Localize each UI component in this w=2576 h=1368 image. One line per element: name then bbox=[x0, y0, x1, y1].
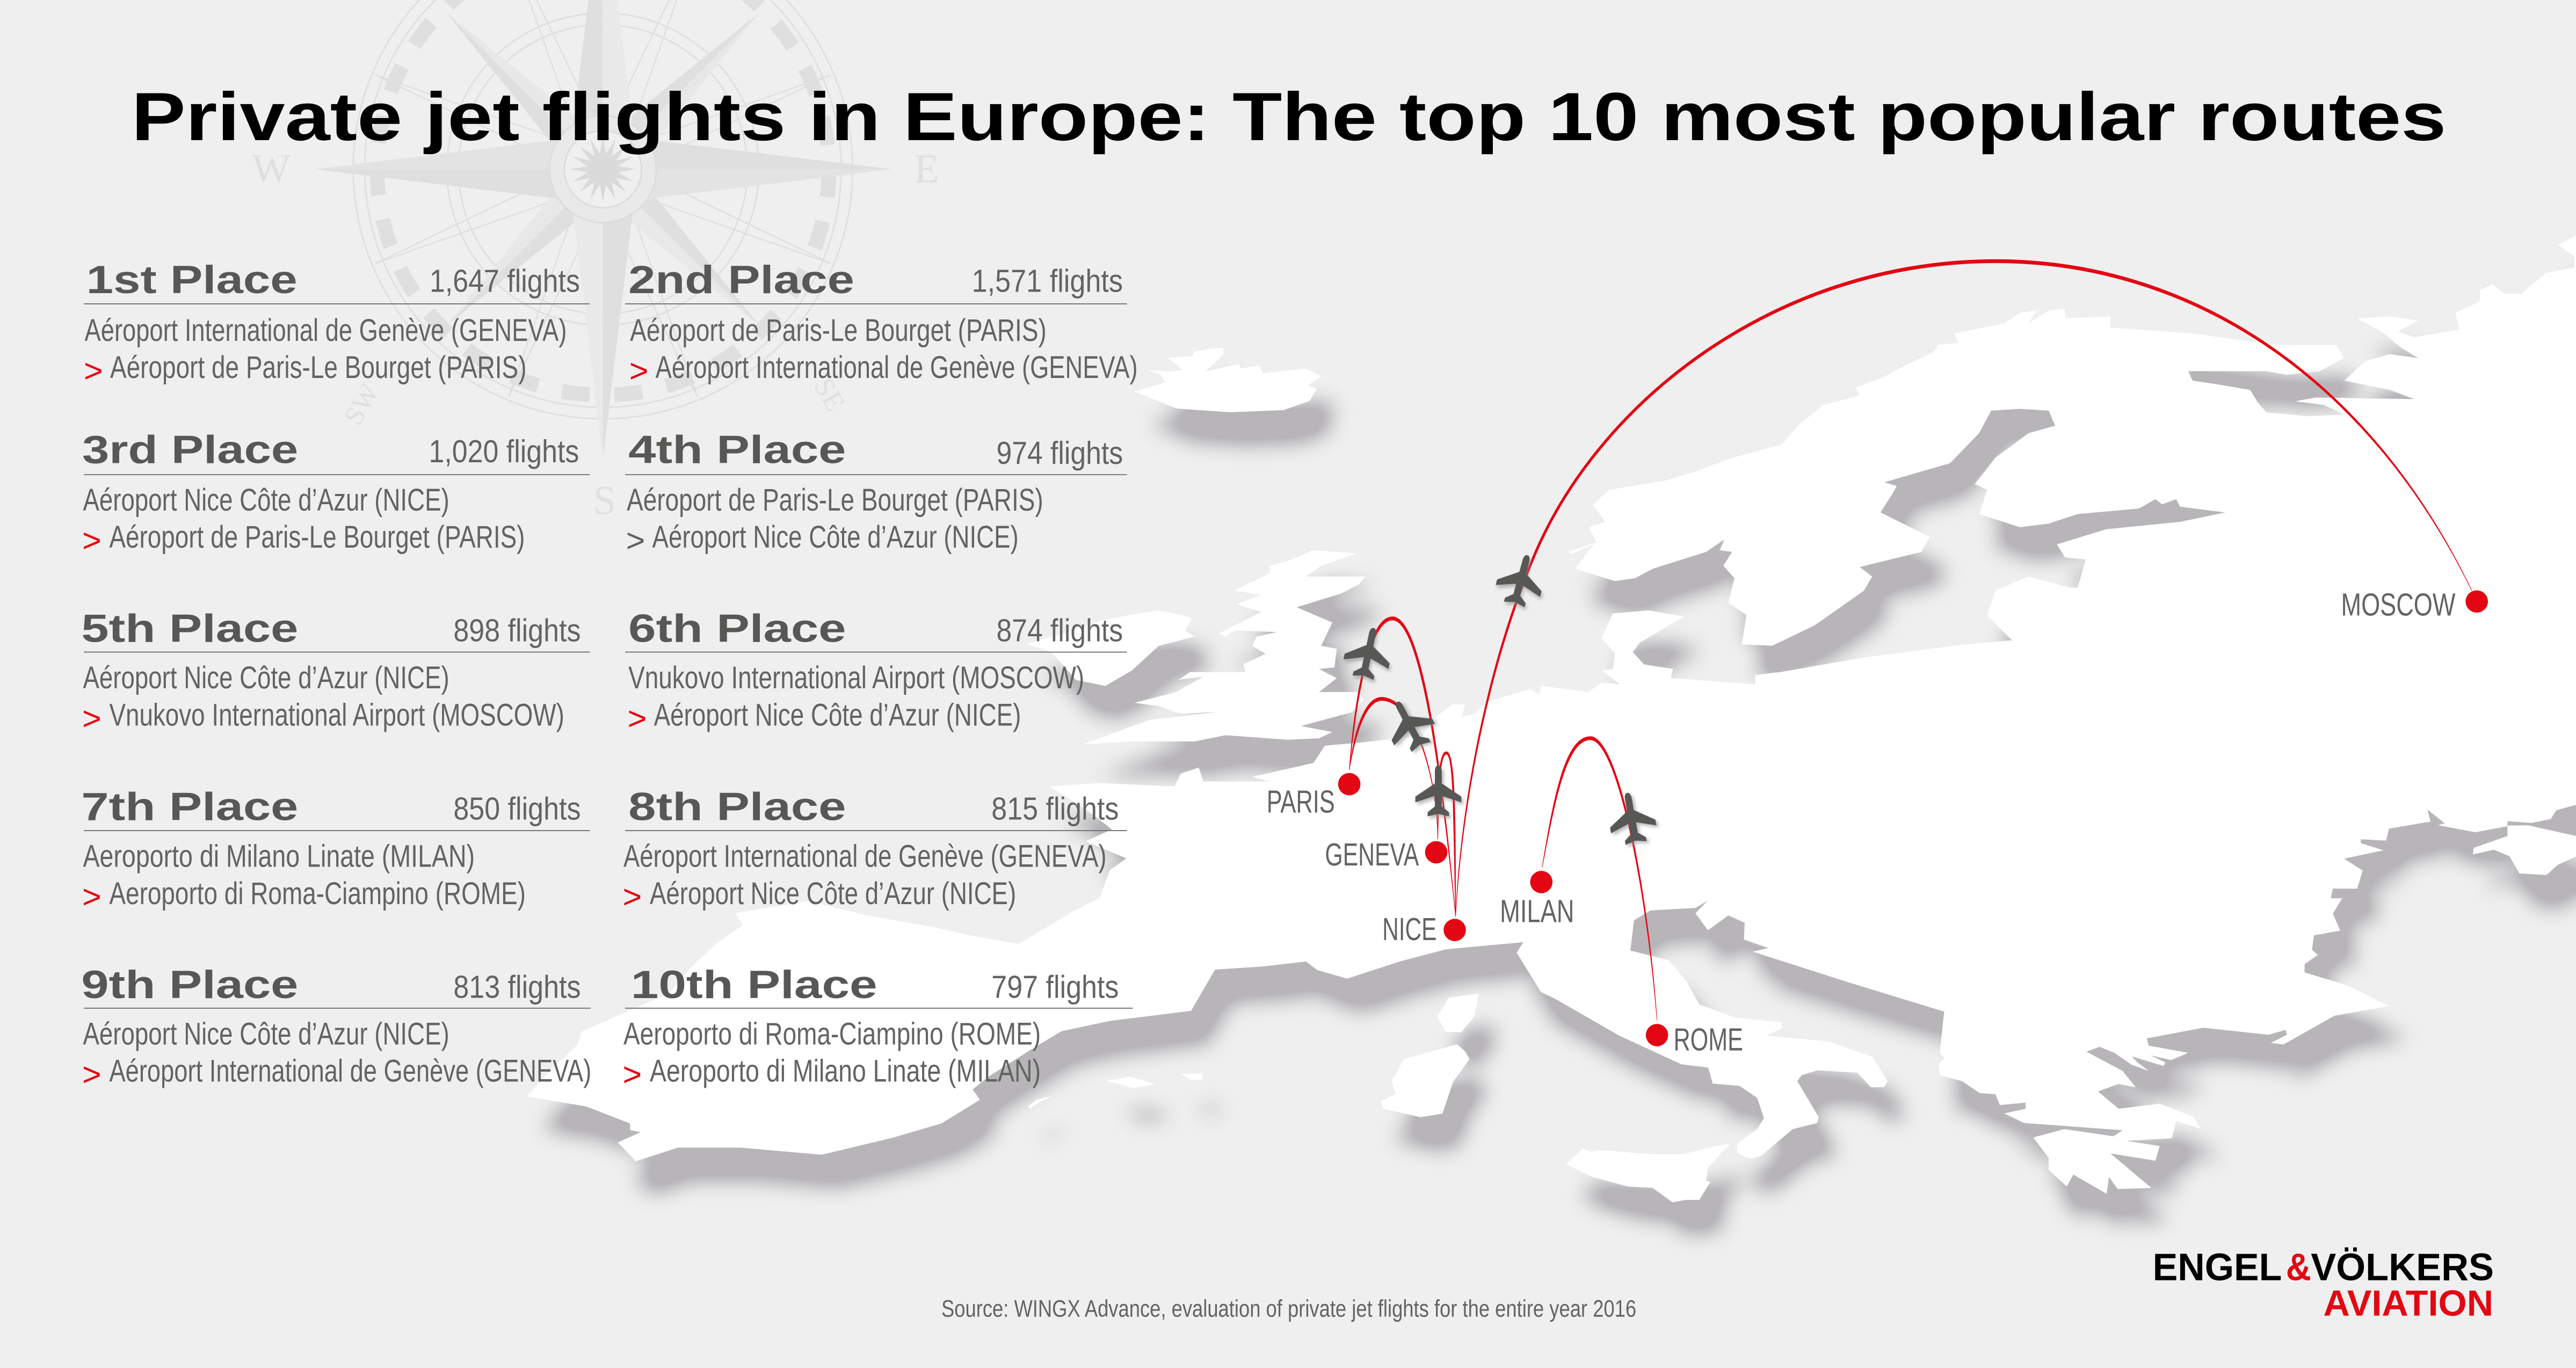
panel: 4th place bbox=[625, 428, 1127, 558]
panel: 9th place bbox=[81, 963, 591, 1093]
panel: 10th place: > bbox=[622, 1056, 642, 1093]
panel: 1st place: 1st Place bbox=[86, 258, 297, 302]
panel: 6th place: 874 flights bbox=[996, 613, 1123, 649]
panel: 1st place: Aéroport de Paris-Le Bourget (PARIS) bbox=[110, 350, 527, 385]
panel: 1st place: > bbox=[84, 353, 103, 389]
panel: 9th place: Aéroport International de Genève (GENEVA) bbox=[109, 1054, 591, 1089]
panel: 5th place: 5th Place bbox=[81, 606, 298, 650]
panel: 8th place: 815 flights bbox=[991, 791, 1119, 827]
panel: 10th place: Aeroporto di Roma-Ciampino (ROME) bbox=[623, 1017, 1041, 1052]
route: Milan to Rome bbox=[1542, 737, 1657, 1020]
city marker: Milan: MILAN bbox=[1500, 893, 1574, 929]
logo: Engel & Völkers Aviation: AVIATION bbox=[2323, 1284, 2493, 1324]
title: Private jet flights in Europe: The top 10 most popular routes bbox=[132, 78, 2446, 155]
Sicily bbox=[1566, 1144, 1730, 1202]
panel: 6th place: 6th Place bbox=[628, 606, 846, 650]
mainland Europe bbox=[527, 235, 2576, 1194]
panel: 4th place: > bbox=[626, 522, 645, 558]
panel: 7th place: Aeroporto di Milano Linate (MILAN) bbox=[83, 839, 475, 874]
panel: 10th place: Aeroporto di Milano Linate (MILAN) bbox=[650, 1054, 1041, 1089]
Iceland bbox=[1134, 348, 1321, 412]
route: Paris to Nice bbox=[1349, 617, 1456, 916]
panel: 2nd place: 2nd Place bbox=[628, 258, 854, 302]
Ireland bbox=[1027, 610, 1194, 686]
panel: 2nd place: 1,571 flights bbox=[972, 263, 1123, 299]
city marker: Geneva: GENEVA bbox=[1325, 836, 1419, 872]
panel: 4th place: 4th Place bbox=[628, 428, 846, 472]
panel: 3rd place: > bbox=[82, 522, 101, 558]
panel: 8th place: > bbox=[622, 878, 642, 915]
Sardinia bbox=[1381, 1044, 1470, 1117]
plane: Paris to Nice route bbox=[1340, 623, 1396, 682]
panel: 1st place: Aéroport International de Genève (GENEVA) bbox=[85, 313, 567, 348]
route: Nice to Moscow bbox=[1456, 259, 2472, 916]
panel: 2nd place: Aéroport International de Genève (GENEVA) bbox=[656, 350, 1138, 385]
panel: 6th place: Vnukovo International Airport (MOSCOW) bbox=[628, 660, 1084, 695]
panel: 1st place: 1,647 flights bbox=[430, 263, 580, 299]
Caucasus landmass bbox=[2473, 825, 2576, 875]
panel: 5th place: Aéroport Nice Côte d’Azur (NICE) bbox=[83, 660, 449, 695]
logo: Engel & Völkers Aviation: VÖLKERS bbox=[2311, 1246, 2494, 1289]
compass rose watermark: SW bbox=[338, 379, 386, 431]
panel: 8th place: Aéroport International de Genève (GENEVA) bbox=[623, 839, 1106, 874]
panel: 6th place bbox=[625, 606, 1127, 737]
city marker: Rome: ROME bbox=[1674, 1022, 1743, 1058]
panel: 5th place: > bbox=[82, 700, 101, 737]
panel: 7th place: Aeroporto di Roma-Ciampino (ROME) bbox=[109, 876, 526, 911]
panel: 6th place: > bbox=[628, 700, 647, 737]
panel: 3rd place bbox=[82, 428, 590, 558]
panel: 9th place: Aéroport Nice Côte d’Azur (NICE) bbox=[83, 1017, 449, 1052]
panel: 10th place: 797 flights bbox=[991, 969, 1119, 1005]
source note: Source: WINGX Advance, evaluation of private jet flights for the entire year 2016 bbox=[941, 1296, 1636, 1322]
compass rose watermark bbox=[252, 0, 939, 523]
panel: 9th place: 813 flights bbox=[453, 969, 580, 1005]
panel: 1st place bbox=[84, 258, 590, 389]
plane: Geneva to Nice route bbox=[1416, 766, 1461, 816]
panel: 9th place: 9th Place bbox=[81, 963, 298, 1007]
city marker: Rome bbox=[1646, 1022, 1743, 1058]
plane: Paris to Geneva route bbox=[1377, 691, 1441, 758]
panel: 9th place: > bbox=[82, 1056, 101, 1093]
panel: 3rd place: 3rd Place bbox=[82, 428, 298, 472]
panel: 5th place: 898 flights bbox=[453, 613, 580, 649]
city marker: Milan bbox=[1500, 871, 1574, 929]
panel: 4th place: Aéroport Nice Côte d’Azur (NICE) bbox=[652, 520, 1019, 555]
panel: 5th place bbox=[81, 606, 590, 737]
panel: 7th place: > bbox=[82, 878, 101, 915]
compass rose watermark: E bbox=[914, 146, 939, 192]
city marker: Paris: PARIS bbox=[1267, 783, 1335, 819]
compass rose watermark: SE bbox=[808, 373, 851, 417]
panel: 3rd place: 1,020 flights bbox=[429, 433, 579, 469]
panel: 2nd place: > bbox=[629, 353, 648, 389]
panel: 2nd place bbox=[625, 258, 1138, 389]
Great Britain bbox=[1083, 550, 1366, 744]
panel: 3rd place: Aéroport Nice Côte d’Azur (NICE) bbox=[83, 483, 449, 518]
panel: 10th place bbox=[622, 963, 1133, 1093]
panel: 3rd place: Aéroport de Paris-Le Bourget (PARIS) bbox=[109, 520, 525, 555]
map of Europe with drop shadow bbox=[527, 235, 2576, 1202]
panel: 10th place: 10th Place bbox=[631, 963, 877, 1007]
panel: 2nd place: Aéroport de Paris-Le Bourget (PARIS) bbox=[630, 313, 1047, 348]
plane: Milan to Rome route bbox=[1605, 789, 1659, 847]
panel: 6th place: Aéroport Nice Côte d’Azur (NICE) bbox=[654, 698, 1021, 733]
panel: 8th place bbox=[622, 785, 1127, 915]
city marker: Moscow: MOSCOW bbox=[2341, 586, 2456, 622]
plane: Moscow route bbox=[1492, 549, 1550, 610]
route: Geneva to Nice bbox=[1438, 752, 1456, 916]
compass rose watermark: S bbox=[593, 478, 616, 523]
panel: 8th place: 8th Place bbox=[628, 785, 846, 829]
Balearic islands bbox=[1028, 1073, 1202, 1109]
compass rose watermark: W bbox=[252, 146, 291, 192]
route: Paris to Geneva bbox=[1349, 697, 1438, 839]
logo: Engel & Völkers Aviation: & bbox=[2286, 1246, 2311, 1289]
panel: 4th place: Aéroport de Paris-Le Bourget (PARIS) bbox=[627, 483, 1043, 518]
logo: Engel & Völkers Aviation bbox=[2153, 1246, 2494, 1324]
city marker: Nice: NICE bbox=[1382, 911, 1436, 947]
panel: 4th place: 974 flights bbox=[996, 435, 1123, 471]
panel: 7th place bbox=[81, 785, 590, 915]
panel: 7th place: 7th Place bbox=[81, 785, 298, 829]
panel: 5th place: Vnukovo International Airport (MOSCOW) bbox=[109, 698, 564, 733]
panel: 8th place: Aéroport Nice Côte d’Azur (NICE) bbox=[650, 876, 1016, 911]
logo: Engel & Völkers Aviation: ENGEL bbox=[2153, 1246, 2282, 1289]
Corsica bbox=[1438, 994, 1479, 1032]
panel: 7th place: 850 flights bbox=[453, 791, 580, 827]
